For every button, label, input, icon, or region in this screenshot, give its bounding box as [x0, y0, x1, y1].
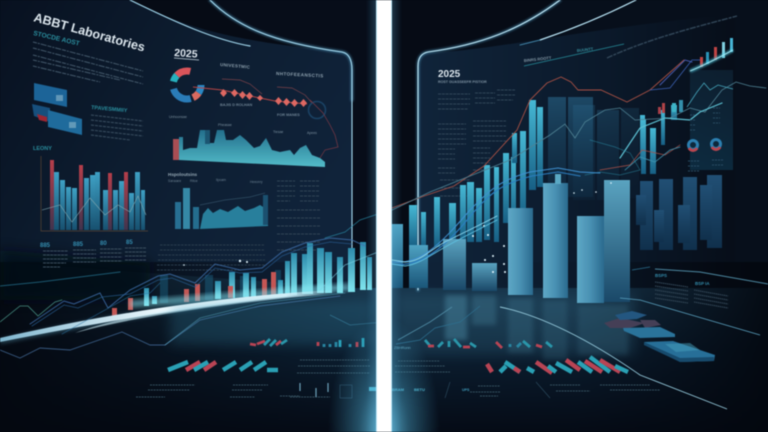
line reflections on floor — [330, 306, 480, 344]
text block: right lower: BSPS — [655, 273, 667, 278]
bar chart: left panel — [41, 156, 148, 231]
title: ABBT Laboratories — [32, 10, 147, 55]
glowing streak on floor — [0, 283, 350, 343]
labels under timeline — [220, 103, 300, 117]
labels above second chart: Ritoe — [190, 179, 198, 183]
small figures on floor: BRAM — [392, 387, 405, 392]
decorative ring and trailing line — [308, 100, 338, 158]
text block: right panel columns — [438, 90, 515, 196]
small donuts: right panel — [688, 140, 720, 150]
candle chart: floor row two — [168, 357, 628, 373]
labels above area chart — [169, 115, 317, 135]
text block: right lower — [655, 273, 728, 308]
labels above area chart: Unhoonsae — [169, 115, 187, 119]
heading: second chart: Hspoloutsins — [168, 172, 198, 177]
stats row: left panel: 885 — [73, 242, 84, 248]
mini chart: right panel upper right — [687, 38, 733, 107]
floor reflections — [170, 295, 635, 360]
heading: 2025 left: 2025 — [174, 47, 198, 61]
heading: column one: UNIVESTMIC — [220, 62, 251, 70]
text block: floor notes — [136, 360, 660, 397]
heading strip: right panel top: BINRS ROOTT — [524, 55, 552, 63]
thin bars: right panel rising — [409, 100, 677, 247]
heading strip: right panel top — [524, 16, 737, 66]
text block: right lower: BSP IA — [695, 281, 710, 286]
area chart: lower — [175, 188, 268, 229]
floor — [0, 250, 768, 432]
neon frame: right panel — [418, 0, 636, 290]
text block: investment — [91, 115, 143, 140]
bars: rising row red — [112, 272, 276, 316]
heading: investment: TPAVESMMIIY — [91, 105, 128, 114]
red mini bars in centre right — [658, 100, 683, 114]
heading: column two: NHTOFEEANSCTIS — [276, 71, 324, 78]
blue ribbon line — [392, 168, 600, 266]
bars: ghost columns behind rising row — [160, 270, 281, 303]
panel: right wall — [392, 0, 768, 432]
dark columns: right panel upper right — [690, 70, 733, 170]
labels above area chart: Pheasae — [218, 123, 232, 127]
stats row: left panel: 85 — [126, 240, 133, 246]
solid bars: front row — [389, 174, 630, 303]
centre beam — [328, 0, 440, 432]
lines: trend lines right panel — [392, 60, 766, 210]
stats row: left panel: 885 — [40, 243, 51, 249]
labels above area chart: Apees — [307, 131, 317, 135]
text block: intro — [33, 42, 143, 84]
panel: left wall — [0, 0, 376, 290]
small figures on floor: BETU — [414, 387, 425, 392]
dim bars: right panel — [636, 175, 722, 250]
neon frame: left panel — [130, 0, 352, 290]
ghost towers: right panel — [548, 97, 639, 200]
text block: beside second chart — [277, 181, 320, 250]
text block: right panel heading: ROST GUASSEEFR PISTIOR — [438, 80, 487, 84]
heading: legend: LEONY — [33, 146, 52, 152]
floor line: right diagonal — [500, 307, 727, 409]
stacked cards on floor — [604, 311, 715, 362]
text block: right panel heading: 2025 — [438, 69, 461, 80]
sparkle points — [183, 182, 612, 273]
label row on floor: ZBHRonn — [394, 346, 411, 350]
small figures on floor: UPS — [462, 388, 470, 392]
stats row: left panel — [40, 240, 146, 267]
trend lines on left wall — [0, 214, 378, 358]
icon: stacked report screens — [32, 83, 82, 135]
labels above second chart: Ilpoam — [216, 178, 226, 182]
subtitle: STOCDE AOST — [33, 30, 80, 48]
labels above second chart: Sanaaee — [168, 179, 181, 183]
bars: rising row on left wall — [144, 242, 372, 306]
small figures on floor — [300, 382, 550, 398]
donut chart — [173, 71, 201, 99]
diamond timeline — [193, 79, 312, 107]
stats row: left panel: 80 — [100, 241, 107, 247]
text block: right panel heading — [438, 69, 487, 84]
labels above area chart: Tiesae — [273, 130, 283, 134]
labels above second chart — [168, 178, 263, 184]
labels above second chart: Heeonry — [250, 180, 263, 184]
area chart: upper — [173, 130, 325, 167]
text block: column labels right — [688, 108, 724, 171]
floor edge lines: right — [620, 267, 768, 335]
labels under timeline: FOR MANES — [277, 113, 300, 117]
candle chart: floor row one left — [250, 338, 552, 348]
labels under timeline: BAJIS D ROLHAN — [220, 103, 253, 107]
heading strip: right panel top: BUUNTT — [577, 46, 594, 53]
text block: lower centre left panel — [157, 245, 265, 270]
